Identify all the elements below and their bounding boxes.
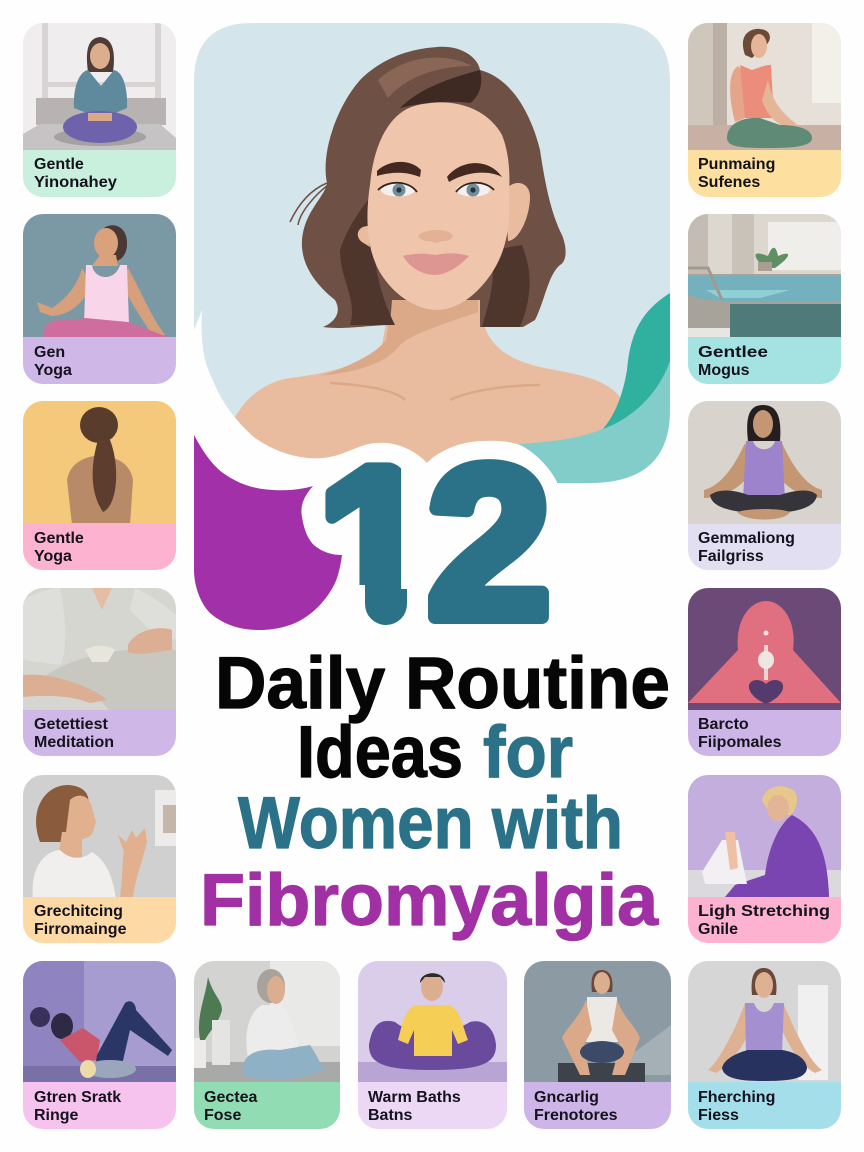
label: Failgriss — [698, 548, 764, 565]
label: Warm Baths — [368, 1089, 461, 1106]
label: Gnile — [698, 921, 738, 938]
card: gemmaliong, seated meditation — [688, 401, 841, 570]
illustration — [194, 961, 340, 1086]
label band — [688, 150, 841, 197]
card: fherching, purple top — [688, 961, 841, 1129]
label: Punmaing — [698, 156, 775, 173]
icon: woman portrait — [235, 47, 620, 480]
wave: light teal — [518, 362, 670, 483]
label: Frenotores — [534, 1107, 618, 1124]
label: Getettiest — [34, 716, 108, 733]
label: Gen — [34, 344, 65, 361]
card: gen yoga, pink top — [23, 214, 176, 384]
card: light stretching — [688, 775, 841, 943]
nose — [418, 230, 453, 243]
card: barcto, body diagram — [688, 588, 841, 756]
label: Fherching — [698, 1089, 775, 1106]
card: gncarlig, seated on block — [524, 961, 671, 1129]
label: Firromainge — [34, 921, 127, 938]
label: Yinonahey — [34, 174, 117, 191]
illustration — [23, 775, 177, 900]
label: Barcto — [698, 716, 749, 733]
title: for — [483, 712, 573, 793]
label band — [688, 337, 841, 384]
label band — [524, 1082, 671, 1129]
title: Ideas — [297, 712, 463, 793]
card: meditation, hands — [23, 588, 176, 756]
illustration — [688, 775, 841, 900]
label band — [23, 337, 176, 384]
card: punmaing, profile seated — [688, 23, 841, 197]
face — [367, 102, 509, 310]
label: Gentle — [34, 530, 84, 547]
eyes — [381, 184, 415, 196]
illustration — [23, 588, 176, 713]
label: Sufenes — [698, 174, 760, 191]
illustration — [23, 214, 176, 339]
wave: dark teal — [600, 293, 672, 432]
title: Daily Routine — [215, 643, 670, 724]
label: Gentle — [34, 156, 84, 173]
illustration — [524, 961, 671, 1086]
number 12: 2 — [428, 422, 551, 663]
ears — [508, 183, 530, 241]
label: Batns — [368, 1107, 413, 1124]
illustration — [23, 23, 176, 153]
label band — [358, 1082, 507, 1129]
hair — [302, 47, 566, 328]
label: Yoga — [34, 548, 72, 565]
card: stretch with roller — [23, 961, 176, 1129]
label band — [688, 710, 841, 756]
card: gentle yoga, back view — [23, 401, 176, 570]
label: Meditation — [34, 734, 114, 751]
label: Fiess — [698, 1107, 739, 1124]
label band — [23, 897, 176, 943]
number 12: 1 — [318, 423, 433, 664]
label band — [194, 1082, 340, 1129]
illustration — [23, 401, 176, 526]
illustration — [688, 961, 841, 1086]
label: Gemmaliong — [698, 530, 795, 547]
illustration — [23, 961, 176, 1086]
label band — [23, 523, 176, 570]
label: Gectea — [204, 1089, 257, 1106]
label band — [23, 710, 176, 756]
label: Mogus — [698, 362, 750, 379]
portrait panel — [194, 23, 680, 493]
illustration — [688, 214, 841, 340]
card: warm baths, yellow shirt — [358, 961, 507, 1129]
label band — [688, 1082, 841, 1129]
label: Ligh Stretching — [698, 903, 830, 920]
illustration — [688, 588, 841, 713]
illustration — [688, 401, 841, 526]
label: Fose — [204, 1107, 241, 1124]
label: Gtren Sratk — [34, 1089, 121, 1106]
label band — [23, 1082, 176, 1129]
title: Women with — [238, 783, 623, 864]
illustration — [688, 23, 841, 153]
lips — [403, 253, 469, 275]
label: Gncarlig — [534, 1089, 599, 1106]
label band — [23, 150, 176, 197]
label: Fiipomales — [698, 734, 782, 751]
card: grechitcing, talking woman — [23, 775, 177, 943]
purple blob — [194, 435, 342, 630]
card: gentlee mogus, pool — [688, 214, 841, 384]
label band — [688, 524, 841, 570]
shoulders and neck — [235, 300, 620, 463]
label: Ringe — [34, 1107, 79, 1124]
illustration — [358, 961, 507, 1086]
card: gectea, older woman — [194, 961, 340, 1129]
label: Yoga — [34, 362, 72, 379]
label: Grechitcing — [34, 903, 123, 920]
card: gentle yoga, seated by window — [23, 23, 176, 197]
title — [200, 643, 670, 941]
number 12 — [325, 459, 549, 625]
brows — [377, 162, 421, 177]
title: Fibromyalgia — [200, 860, 659, 941]
label band — [688, 897, 841, 943]
label: Gentlee — [698, 344, 768, 361]
white cutout around title number — [194, 310, 557, 640]
